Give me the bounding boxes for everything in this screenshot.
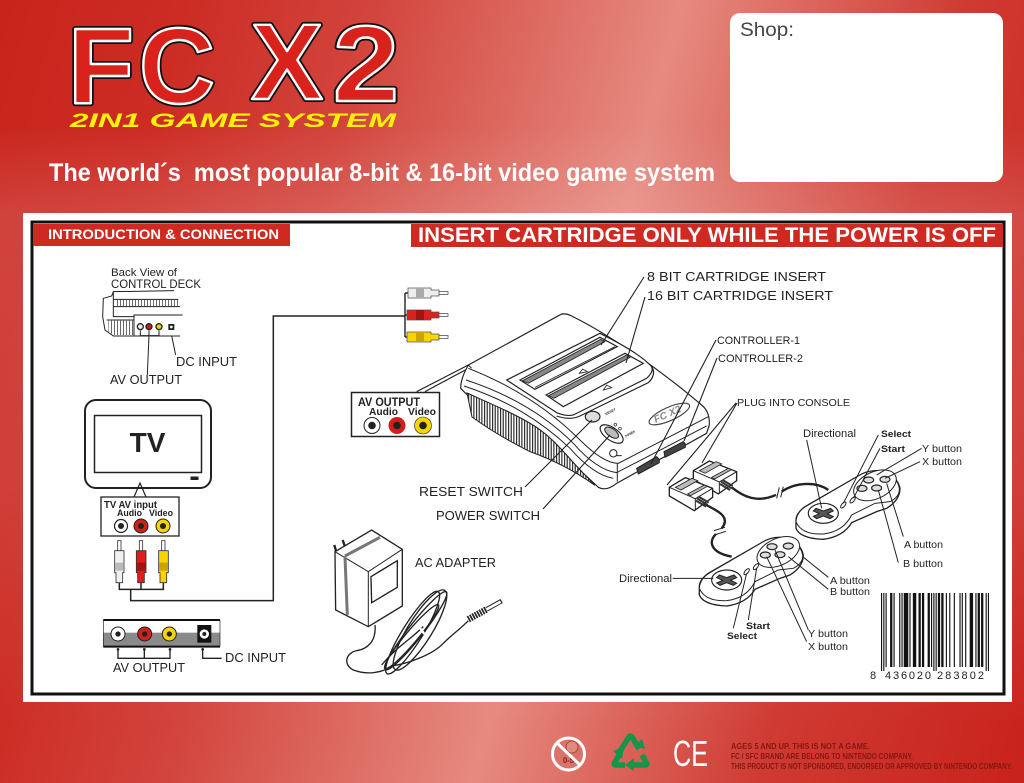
controller labels: Y button <box>808 628 848 640</box>
logo: FC X2: F <box>68 5 134 126</box>
RCA plugs to TV <box>115 316 405 601</box>
controller labels: X button <box>808 641 848 653</box>
back view of control deck: CONTROL DECK <box>111 279 201 291</box>
16 bit slot <box>546 353 643 407</box>
console labels: 8 BIT CARTRIDGE INSERT <box>647 269 826 284</box>
AV output box: Video <box>408 407 436 418</box>
TV <box>85 400 211 488</box>
AV output box: AV OUTPUT <box>358 397 420 409</box>
controllers and connectors <box>669 435 922 642</box>
subtitle: 2in1 game system: 2IN1 GAME SYSTEM <box>68 111 398 132</box>
controller labels: A button <box>904 539 943 551</box>
TV AV input box <box>101 483 179 536</box>
barcode <box>870 593 989 682</box>
AV output box <box>352 365 468 436</box>
icon: CE mark: CE <box>673 733 708 774</box>
shop box: Shop: <box>740 20 794 41</box>
power switch: POWER <box>625 429 636 438</box>
controller labels: Select <box>727 631 758 642</box>
barcode: 283802 <box>937 670 984 682</box>
bottom AV panel <box>103 620 286 675</box>
cable 1 <box>732 484 828 499</box>
icon: recycle <box>613 736 647 771</box>
back view of control deck: Back View of <box>111 267 178 279</box>
controller labels: Directional <box>619 573 672 585</box>
logo: FC X2: X <box>251 1 323 122</box>
console: RESET <box>605 407 616 416</box>
controller labels: Y button <box>922 443 962 455</box>
reset button <box>585 411 600 422</box>
logo: FC X2: C <box>139 5 215 126</box>
legal notice: AGES 5 AND UP. THIS IS NOT A GAME. <box>731 742 870 751</box>
power switch <box>597 421 636 457</box>
controller ports <box>637 457 659 474</box>
AC adapter <box>334 530 502 679</box>
TV AV input box: Audio <box>117 508 142 518</box>
shop box <box>730 13 1003 182</box>
AV output box: Audio <box>369 407 398 418</box>
back view of control deck: AV OUTPUT <box>110 372 182 387</box>
console labels: CONTROLLER-2 <box>718 353 803 365</box>
console labels: 16 BIT CARTRIDGE INSERT <box>647 288 833 303</box>
controller labels: X button <box>922 456 962 468</box>
connector 2 <box>669 478 713 511</box>
legal notice: FC / SFC BRAND ARE BELONG TO NINTENDO COMPANY. <box>731 752 913 761</box>
controller labels: A button <box>830 575 870 587</box>
console labels: PLUG INTO CONSOLE <box>737 397 850 409</box>
console leader lines <box>525 277 737 509</box>
icon: age warning 0-5 <box>552 738 584 770</box>
main instruction panel <box>23 213 1012 702</box>
controller labels: Start <box>746 621 771 632</box>
logo: FC X2: F <box>68 5 134 126</box>
logo: FC X2: 2 <box>333 3 399 124</box>
console vents <box>467 393 595 485</box>
console logo badge: FC X2 <box>652 404 683 426</box>
connector 1 <box>693 461 737 494</box>
logo: FC X2: 2 <box>333 3 399 124</box>
console labels: RESET SWITCH <box>419 484 523 499</box>
cable 2 <box>703 503 732 557</box>
TV AV input box: TV AV input <box>104 500 158 511</box>
barcode: 8 <box>870 670 876 682</box>
8 bit slot <box>520 337 617 389</box>
tagline: The world´s most popular 8-bit & 16-bit video game system <box>49 159 715 187</box>
TV AV input box: Video <box>149 508 173 518</box>
back view of control deck: DC INPUT <box>176 354 237 369</box>
controller 1 <box>796 464 901 539</box>
console labels <box>419 269 850 523</box>
back view of control deck <box>103 267 237 387</box>
console labels: POWER SWITCH <box>436 508 540 523</box>
logo: FC X2: X <box>251 1 323 122</box>
RCA plugs at console end <box>405 288 448 342</box>
logo: FC X2 <box>68 1 399 126</box>
console logo badge <box>646 399 692 429</box>
cartridge tray <box>507 333 652 415</box>
console body <box>461 314 709 489</box>
icon: age warning 0-5: 0-5 <box>563 756 575 765</box>
heading: introduction <box>33 224 290 246</box>
barcode: 436020 <box>885 670 931 682</box>
controller leader lines <box>673 435 922 642</box>
legal notice <box>731 742 1012 771</box>
controller labels: Directional <box>803 428 856 440</box>
bottom AV panel: AV OUTPUT <box>113 660 185 675</box>
controller 2 <box>699 530 804 606</box>
controller labels: Start <box>881 444 906 455</box>
console <box>461 314 709 489</box>
bottom AV panel: DC INPUT <box>225 650 286 665</box>
controller labels <box>619 428 962 653</box>
heading: warning: INSERT CARTRIDGE ONLY WHILE THE POWER IS OFF <box>418 224 996 247</box>
heading: introduction: INTRODUCTION & CONNECTION <box>48 227 279 242</box>
logo: FC X2: C <box>139 5 215 126</box>
AC adapter: AC ADAPTER <box>415 555 496 570</box>
TV: TV <box>130 427 166 458</box>
controller labels: B button <box>830 586 870 598</box>
controller labels: B button <box>903 558 943 570</box>
console labels: CONTROLLER-1 <box>717 335 800 347</box>
controller labels: Select <box>881 429 912 440</box>
